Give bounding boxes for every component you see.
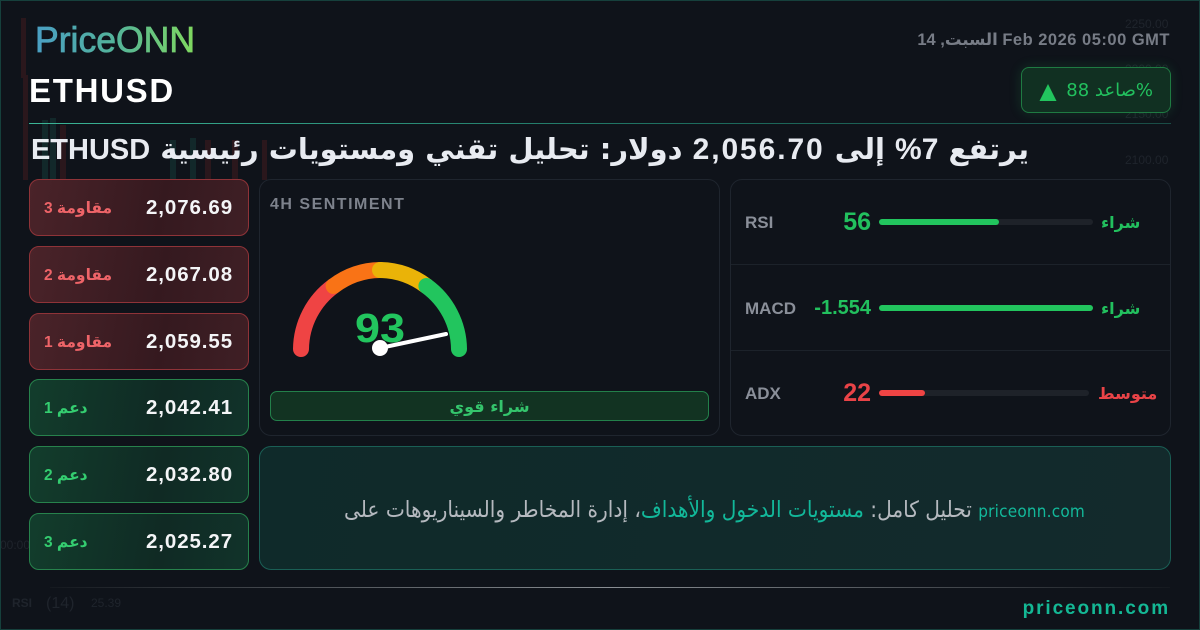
background chart: 2200.00	[1125, 62, 1169, 76]
row: MACD: -1.554	[814, 297, 871, 319]
panel: level support 2	[29, 446, 249, 503]
panel: level support 3	[29, 513, 249, 570]
panel: level resistance 1	[29, 313, 249, 370]
panel: level resistance 2: 2,067.08	[146, 263, 233, 286]
background chart: (14)	[46, 595, 74, 612]
background chart: 2100.00	[1125, 153, 1169, 167]
row: RSI: 56	[843, 208, 871, 236]
row: MACD: شراء	[1101, 299, 1140, 318]
icon: up triangle	[1040, 84, 1056, 101]
panel: level support 3: دعم 3	[44, 534, 88, 551]
row: RSI: RSI	[745, 213, 773, 232]
panel: level support 3: 2,025.27	[146, 530, 233, 553]
panel: level resistance 3: 2,076.69	[146, 196, 233, 219]
date and time: 14 ,السبت Feb 2026 05:00 GMT	[917, 31, 1170, 49]
panel: call to action	[259, 446, 1171, 570]
panel: level resistance 3	[29, 179, 249, 236]
panel: level resistance 3: مقاومة 3	[44, 200, 112, 217]
logo: PriceONN	[35, 19, 195, 60]
panel: level support 1: 2,042.41	[146, 396, 233, 419]
row: MACD: MACD	[745, 299, 796, 318]
row: ADX	[745, 379, 1157, 407]
trend badge	[1021, 67, 1171, 113]
panel: level resistance 1: 2,059.55	[146, 330, 233, 353]
panel: indicators	[730, 179, 1171, 436]
background chart: 2150.00	[1125, 107, 1169, 121]
badge text: %صاعد 88	[1066, 80, 1153, 101]
header divider	[29, 123, 1171, 124]
panel: level resistance 1: مقاومة 1	[44, 334, 112, 351]
main title: 2,056.70	[693, 133, 825, 166]
panel: sentiment gauge	[259, 179, 720, 436]
row: ADX: ADX	[745, 384, 781, 403]
gauge chart	[293, 262, 467, 357]
panel: level support 1	[29, 379, 249, 436]
background chart: 25.39	[91, 596, 121, 610]
panel: level resistance 2	[29, 246, 249, 303]
row: MACD	[731, 265, 1170, 351]
row: RSI	[731, 180, 1170, 265]
background chart: RSI	[12, 596, 32, 610]
background chart: 00:00	[0, 538, 30, 552]
background chart: 2250.00	[1125, 17, 1169, 31]
row: RSI: شراء	[1101, 213, 1140, 232]
call to action text: priceonn.com تحليل كامل: مستويات الدخول والأهداف، إدارة المخاطر والسيناريوهات على	[344, 497, 1085, 523]
panel: level support 2: دعم 2	[44, 467, 88, 484]
row: ADX: 22	[843, 379, 871, 407]
footer divider	[50, 587, 1170, 588]
gauge chart: 93	[355, 305, 405, 351]
main title: يرتفع 7% إلى دولار: تحليل تقني ومستويات رئيسية ETHUSD	[31, 132, 1029, 166]
sentiment label: شراء قوي	[449, 397, 530, 416]
sentiment heading: 4H SENTIMENT	[270, 196, 405, 213]
panel: level support 1: دعم 1	[44, 400, 88, 417]
sentiment label	[270, 391, 709, 421]
panel: level support 2: 2,032.80	[146, 463, 233, 486]
symbol heading: ETHUSD	[29, 72, 175, 109]
row: ADX: متوسط	[1098, 384, 1157, 403]
panel: level resistance 2: مقاومة 2	[44, 267, 112, 284]
footer site: priceonn.com	[1023, 598, 1170, 619]
